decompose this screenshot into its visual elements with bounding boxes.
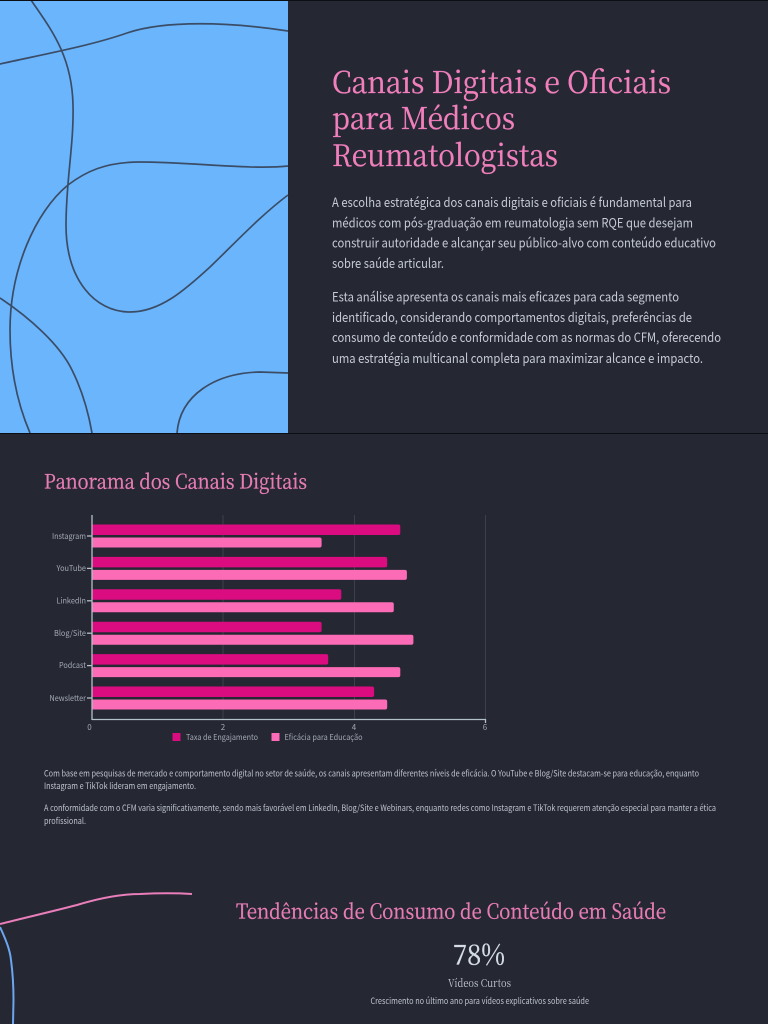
y axis labels: Newsletter xyxy=(50,693,87,704)
stat: 78%: 78% xyxy=(453,934,505,974)
text block: introduction paragraph 1: construir autoridade e alcançar seu público-alvo com conteúdo educativo xyxy=(332,232,716,252)
x axis labels xyxy=(87,722,488,733)
bars: Podcast xyxy=(90,654,400,677)
title: Canais Digitais e Oficiais xyxy=(332,58,671,102)
text block: introduction paragraph 2: identificado, considerando comportamentos digitais, preferências de xyxy=(332,307,692,326)
text block: introduction paragraph 2: Esta análise apresenta os canais mais eficazes para cada segmento xyxy=(332,286,679,306)
heading: Panorama dos Canais Digitais: Panorama dos Canais Digitais xyxy=(44,466,307,494)
bars: YouTube xyxy=(90,557,407,580)
x axis labels: 6 xyxy=(483,722,488,733)
stat label: Vídeos Curtos: Vídeos Curtos xyxy=(448,975,511,991)
text block: CFM compliance: profissional. xyxy=(44,815,86,827)
x axis labels: 2 xyxy=(221,722,226,733)
text block: introduction paragraph 1 xyxy=(332,192,716,272)
x axis labels: 0 xyxy=(87,722,92,733)
title: para Médicos xyxy=(332,94,515,138)
text block: channel analysis: Instagram e TikTok lideram em engajamento. xyxy=(44,780,196,792)
legend: Taxa de Engajamento xyxy=(186,732,258,743)
text block: introduction paragraph 1: A escolha estratégica dos canais digitais e oficiais é fundamental para xyxy=(332,192,692,211)
bars: LinkedIn xyxy=(90,589,394,612)
y axis labels: LinkedIn xyxy=(56,596,86,606)
bars: Blog/Site xyxy=(90,622,413,645)
y axis labels: YouTube xyxy=(56,563,87,574)
title xyxy=(332,58,671,175)
text block: CFM compliance xyxy=(44,802,716,827)
panel: blue decorative hero xyxy=(0,0,288,433)
text block: introduction paragraph 1: sobre saúde articular. xyxy=(332,253,444,272)
bar chart: engagement and education efficacy by channel xyxy=(50,515,488,743)
bars: Newsletter xyxy=(90,686,387,710)
y axis labels xyxy=(50,531,87,704)
bars: Instagram xyxy=(90,524,400,548)
decorative curves xyxy=(0,893,192,1024)
x axis labels: 4 xyxy=(352,722,357,733)
y axis labels: Instagram xyxy=(52,531,86,542)
title: Reumatologistas xyxy=(332,131,558,175)
heading: Tendências de Consumo de Conteúdo em Saúde: Tendências de Consumo de Conteúdo em Saúde xyxy=(236,894,666,924)
text block: introduction paragraph 2: uma estratégia multicanal completa para maximizar alcance e impacto. xyxy=(332,348,703,367)
y axis labels: Blog/Site xyxy=(54,628,87,639)
legend xyxy=(172,732,363,743)
text block: introduction paragraph 1: médicos com pós-graduação em reumatologia sem RQE que desejam xyxy=(332,212,693,232)
stat description: Crescimento no último ano para vídeos explicativos sobre saúde xyxy=(370,995,589,1007)
legend: Eficácia para Educação xyxy=(284,732,363,743)
text block: channel analysis xyxy=(44,768,699,792)
text block: introduction paragraph 2 xyxy=(332,286,721,367)
y axis labels: Podcast xyxy=(59,660,86,671)
